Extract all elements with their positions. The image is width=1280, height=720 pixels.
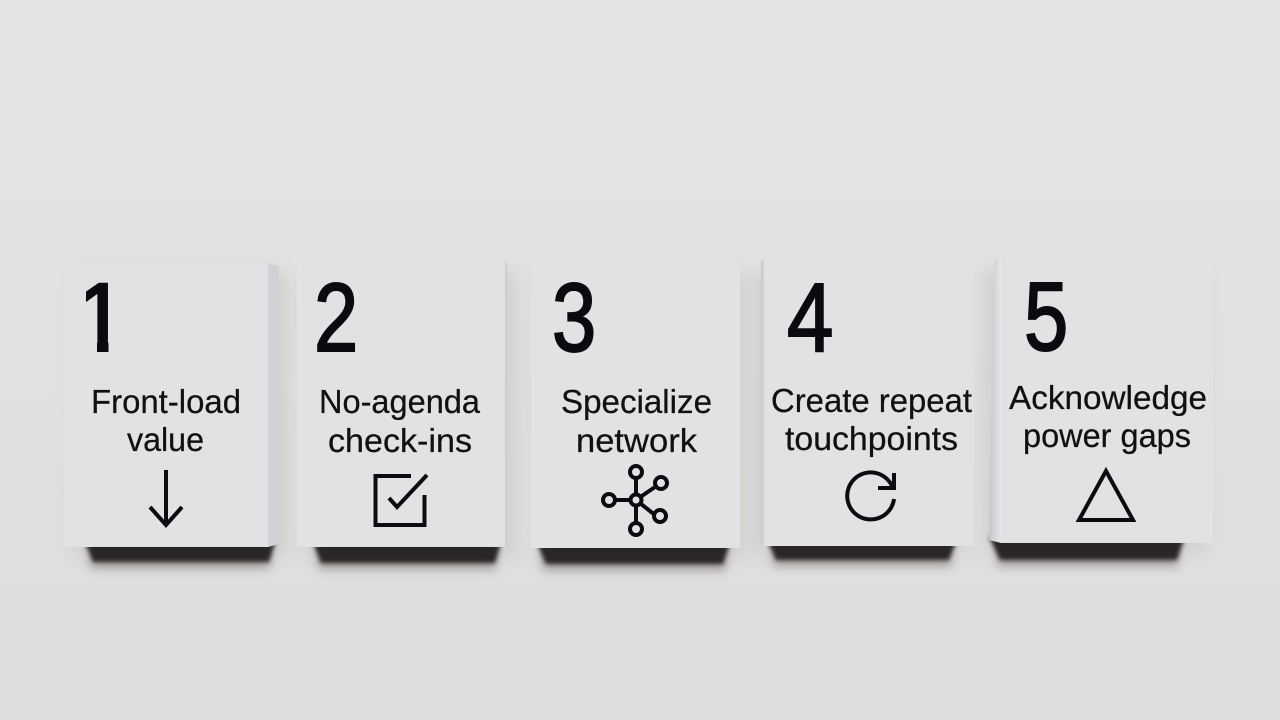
card 2: No-agenda check-ins [297, 261, 515, 569]
label: Acknowledge power gaps: power gaps [1023, 417, 1191, 454]
number 3: 3 [552, 264, 596, 372]
number 5: 5 [1024, 263, 1068, 371]
label: Create repeat touchpoints: touchpoints [785, 420, 958, 457]
number 1: 1 [74, 263, 128, 372]
icon: checkbox [376, 475, 427, 525]
icon: hub network [603, 466, 667, 535]
card 5: Acknowledge power gaps [985, 257, 1213, 566]
label: Create repeat touchpoints: Create repeat [771, 382, 972, 419]
label: Acknowledge power gaps: Acknowledge [1009, 379, 1207, 416]
label: Front-load value: Front-load [91, 383, 241, 420]
card 1: Front-load value [64, 263, 286, 568]
card 4: Create repeat touchpoints [755, 258, 974, 566]
icon: down arrow [150, 470, 182, 525]
icon: refresh arrow [847, 472, 894, 519]
label: No-agenda check-ins: No-agenda [319, 383, 481, 420]
card 3: Specialize network [531, 262, 746, 570]
icon: triangle [1079, 471, 1133, 520]
number 2: 2 [314, 264, 358, 372]
label: Specialize network: Specialize [561, 383, 712, 420]
label: Specialize network: network [576, 422, 698, 459]
number 4: 4 [787, 264, 833, 372]
label: Front-load value: value [127, 421, 204, 458]
label: No-agenda check-ins: check-ins [328, 422, 472, 459]
